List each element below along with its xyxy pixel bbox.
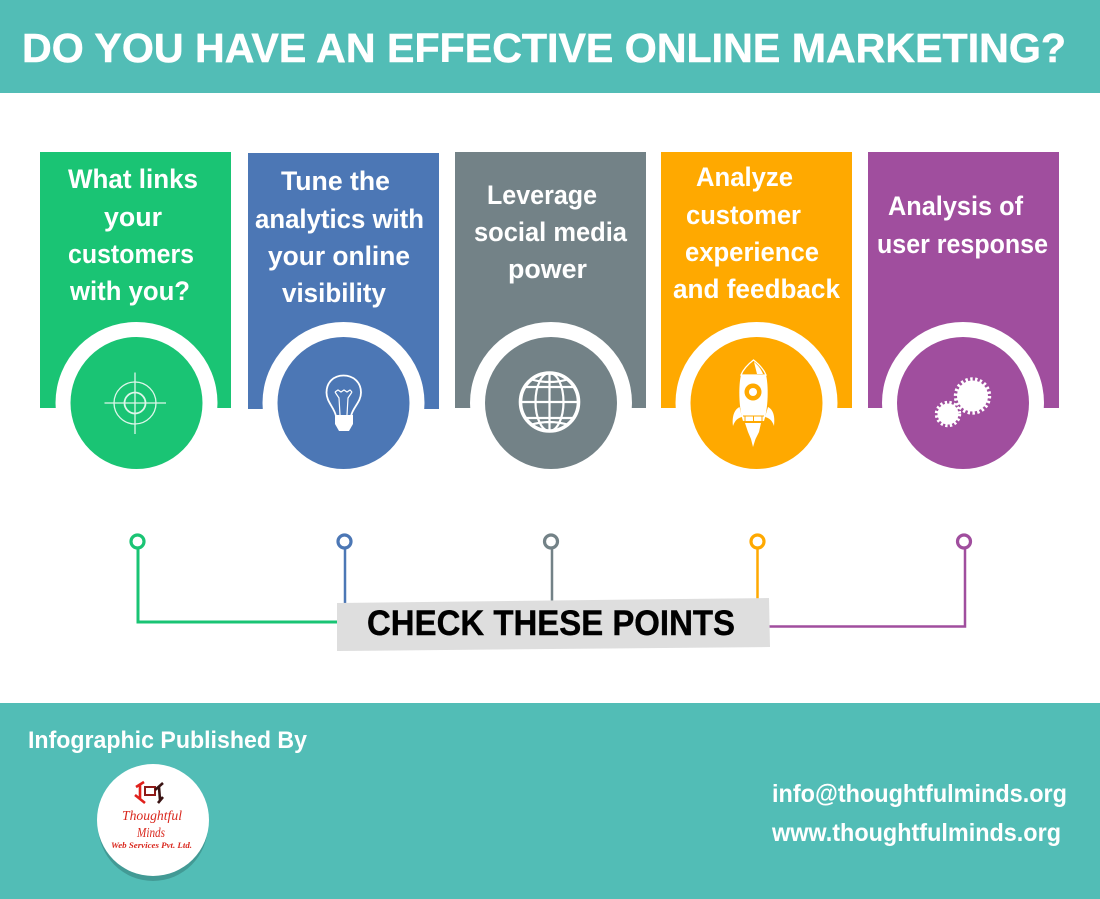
panel text: what links: What links xyxy=(68,164,198,194)
panel text: what links: with you? xyxy=(69,276,190,306)
icon: gears xyxy=(936,379,989,426)
panel text: leverage social media: Leverage xyxy=(487,180,597,210)
panel text: tune the analytics xyxy=(255,166,424,308)
logo text xyxy=(111,809,192,850)
panel text: analyze customer experience: and feedback xyxy=(673,274,841,304)
panel: analyze customer experience xyxy=(661,152,852,484)
panel text: leverage social media: power xyxy=(508,254,587,284)
panel text: what links: customers xyxy=(68,239,194,269)
panel text: leverage social media xyxy=(474,180,628,284)
logo mark xyxy=(135,782,163,803)
title: DO YOU HAVE AN EFFECTIVE ONLINE MARKETING? xyxy=(22,25,1066,71)
connector: purple xyxy=(769,535,970,626)
icon: target crosshair xyxy=(104,372,166,434)
icon: light bulb xyxy=(326,376,361,431)
panel text: analyze customer experience: experience xyxy=(685,237,819,267)
connector: gray xyxy=(544,535,558,602)
banner text: CHECK THESE POINTS xyxy=(367,604,735,643)
contact email: info@thoughtfulminds.org xyxy=(772,780,1067,808)
connector: blue xyxy=(338,535,351,604)
panel text: analyze customer experience: Analyze xyxy=(696,162,793,192)
panel text: tune the analytics: your online xyxy=(268,241,410,271)
logo text: Thoughtful xyxy=(122,809,182,824)
panel: what links your customers xyxy=(40,152,231,484)
footer band xyxy=(0,703,1100,899)
publisher label: Infographic Published By xyxy=(28,727,308,754)
panel: tune the analytics xyxy=(248,153,439,484)
panel text: tune the analytics: Tune the xyxy=(281,166,390,196)
panel text: analysis of user response: user response xyxy=(877,229,1048,259)
panel text: analyze customer experience xyxy=(673,162,841,304)
panel text: what links xyxy=(68,164,198,306)
connector: orange xyxy=(751,535,764,600)
panel text: analyze customer experience: customer xyxy=(686,200,801,230)
connector: green xyxy=(131,535,338,622)
icon: rocket xyxy=(733,360,774,447)
panel: analysis of user response xyxy=(868,152,1059,484)
panel text: leverage social media: social media xyxy=(474,217,628,247)
header band xyxy=(0,0,1100,93)
logo badge xyxy=(97,764,209,881)
icon: globe xyxy=(520,373,578,431)
panel text: tune the analytics: visibility xyxy=(282,278,386,308)
panel text: analysis of user response: Analysis of xyxy=(888,191,1024,221)
contact website: www.thoughtfulminds.org xyxy=(771,819,1061,847)
logo text: Minds xyxy=(136,826,165,841)
panel text: analysis of user response xyxy=(877,191,1048,259)
banner: check these points xyxy=(337,598,770,651)
panel: leverage social media xyxy=(455,152,646,484)
logo text: Web Services Pvt. Ltd. xyxy=(111,841,192,850)
panel text: tune the analytics: analytics with xyxy=(255,204,424,234)
panel text: what links: your xyxy=(104,202,162,232)
